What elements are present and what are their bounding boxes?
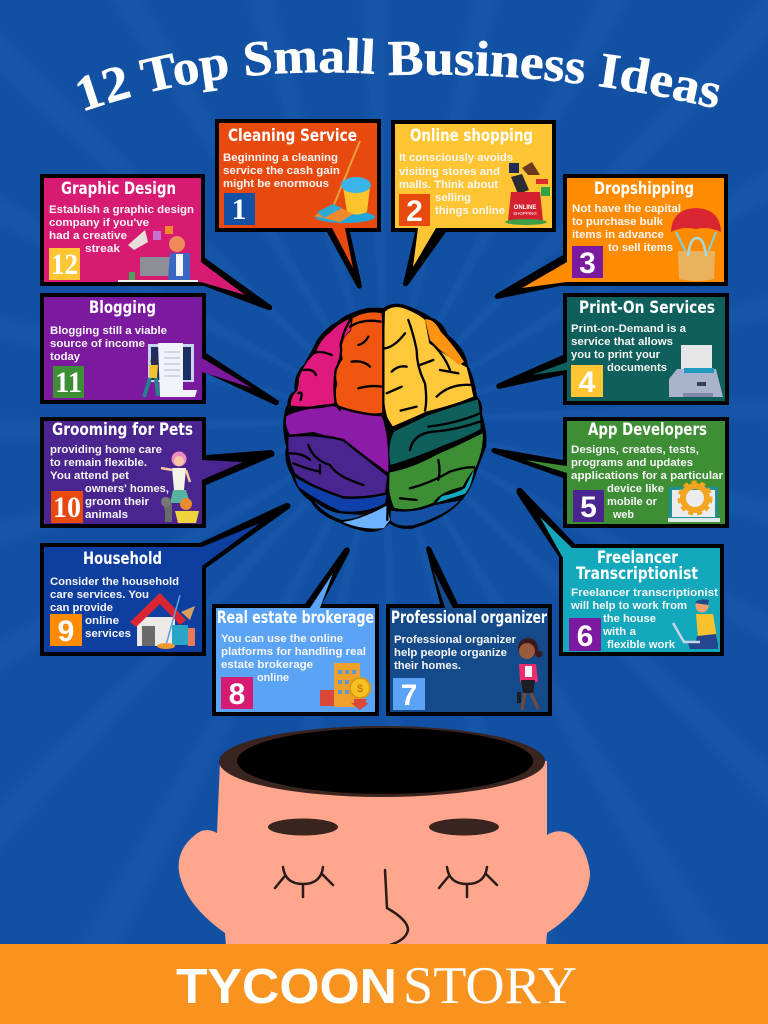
text block: malls. Think about (399, 179, 498, 191)
number 11: 11 (55, 366, 82, 399)
text block: Freelancer transcriptionist (571, 587, 718, 599)
heading: App Developers (588, 420, 707, 439)
panel: 7 professional organizer (386, 546, 552, 716)
icon: businesswoman (517, 638, 542, 710)
icon: laptop with gear (668, 482, 720, 522)
text block: might be enormous (223, 178, 329, 190)
icon: shopping bag: ONLINE (514, 205, 536, 211)
heading: Cleaning Service (228, 126, 357, 145)
text block: you to print your (571, 349, 661, 361)
icon: designer at desk (118, 226, 198, 281)
right eye (439, 867, 497, 897)
text block: services (85, 628, 131, 640)
text block (221, 633, 366, 684)
number 12: 12 (51, 248, 78, 281)
open head rim (219, 726, 545, 797)
text block (571, 444, 724, 521)
text block: visiting stores and (399, 166, 500, 178)
number 3 (572, 246, 603, 280)
text block: had a creative (49, 230, 127, 242)
text block: items in advance (572, 229, 664, 241)
panel: 5 app developers (491, 417, 729, 528)
footer band (0, 944, 768, 1024)
text block: flexible work (607, 639, 676, 651)
icon: shopping bag: SHOPPING (513, 211, 537, 216)
panel: 8 real estate brokerage (212, 547, 379, 716)
panel: 6 freelancer transcriptionist (516, 488, 724, 656)
text block: the house (603, 613, 656, 625)
text block: Not have the capital (572, 203, 681, 215)
text block: estate brokerage (221, 659, 313, 671)
number 7 (393, 678, 425, 712)
text block: Establish a graphic design (49, 204, 194, 216)
heading: Freelancer (597, 548, 679, 567)
text block: platforms for handling real (221, 646, 366, 658)
text block: with a (602, 626, 637, 638)
text block: online (257, 672, 289, 684)
panel: 4 print-on services (496, 293, 729, 405)
text block: to sell items (608, 242, 673, 254)
number 5 (573, 490, 604, 524)
number 6 (569, 618, 601, 653)
heading (576, 548, 698, 583)
text block (49, 204, 194, 255)
title: 12 Top Small Business Ideas (77, 38, 720, 111)
text block: will help to work from (570, 600, 687, 612)
text block (50, 444, 169, 521)
text block (570, 587, 718, 651)
text block: It consciously avoids (399, 152, 513, 164)
panel: 10 grooming for pets (40, 417, 275, 528)
icon: buildings and coin: $ (357, 683, 363, 695)
panel: 11 blogging (40, 293, 279, 405)
text block: programs and updates (571, 457, 693, 469)
number 7: 7 (401, 679, 417, 712)
left eye (275, 867, 333, 897)
text block: help people organize (394, 647, 507, 659)
text block: today (50, 351, 81, 363)
illustration: head (179, 726, 590, 946)
panel: 12 graphic design (40, 174, 272, 310)
text block (223, 152, 340, 190)
number 8 (221, 677, 253, 711)
text block: Professional organizer (394, 634, 517, 646)
icon: woman with pets (161, 452, 199, 523)
text block: web (612, 509, 634, 521)
brain (284, 305, 485, 531)
text block: streak (85, 243, 121, 255)
text block: mobile or (607, 496, 658, 508)
icon: parachute bag (671, 208, 721, 281)
icon: freelancer with laptop (673, 599, 718, 649)
text block: online (85, 615, 119, 627)
text block (571, 323, 687, 374)
left eyebrow (268, 818, 338, 836)
number 9 (50, 614, 82, 648)
text block: owners' homes, (85, 483, 169, 495)
text block: You can use the online (221, 633, 343, 645)
text block (399, 152, 513, 217)
text block (572, 203, 681, 254)
heading: Dropshipping (594, 179, 694, 198)
text block: company if you've (49, 217, 149, 229)
text block: selling (435, 192, 471, 204)
text block: groom their (85, 496, 150, 508)
icon: house with cleaning tools (130, 593, 195, 649)
icon: buildings and coin (320, 663, 370, 710)
text block: providing home care (50, 444, 162, 456)
heading: Graphic Design (61, 179, 176, 198)
text block: service the cash gain (223, 165, 340, 177)
text block: their homes. (394, 660, 461, 672)
number 10: 10 (53, 491, 81, 524)
text block: service that allows (571, 336, 673, 348)
panel: 1 cleaning service (215, 119, 381, 289)
number 3: 3 (579, 247, 596, 280)
text block (394, 634, 517, 672)
number 2 (399, 194, 430, 228)
panel: 9 household (40, 503, 290, 656)
heading: Household (83, 549, 162, 568)
icon: bucket and mop (314, 141, 375, 223)
number 5: 5 (580, 491, 597, 524)
heading: Print-On Services (579, 298, 715, 317)
nose (385, 870, 408, 945)
open head hollow (237, 728, 533, 794)
text block: documents (607, 362, 667, 374)
icon: printer (669, 345, 723, 397)
heading: Transcriptionist (576, 564, 698, 583)
number 2: 2 (406, 195, 423, 228)
heading: Online shopping (410, 126, 533, 145)
text block: Beginning a cleaning (223, 152, 338, 164)
brand logo text: TYCOON (176, 960, 397, 1014)
text block: source of income (50, 338, 145, 350)
text block: animals (85, 509, 128, 521)
text block: device like (607, 483, 664, 495)
text block (50, 325, 167, 363)
text block: to purchase bulk (572, 216, 664, 228)
face (179, 761, 590, 946)
text block: things online (435, 205, 505, 217)
number 1: 1 (232, 193, 246, 226)
text block: to remain flexible. (50, 457, 147, 469)
text block: applications for a particular (571, 470, 724, 482)
heading: Grooming for Pets (52, 420, 193, 439)
heading: Real estate brokerage (217, 608, 374, 627)
text block: Print-on-Demand is a (571, 323, 687, 335)
right eyebrow (429, 818, 499, 836)
icon: blogger with document (144, 343, 197, 397)
icon: shopping bag (505, 162, 550, 225)
brand logo text: STORY (403, 957, 577, 1015)
number 6: 6 (577, 620, 593, 653)
text block: You attend pet (50, 470, 129, 482)
panel: 3 dropshipping (495, 174, 728, 299)
number 1 (224, 193, 255, 226)
text block: Designs, creates, tests, (571, 444, 699, 456)
text block: Consider the household (50, 576, 179, 588)
text block: care services. You (50, 589, 149, 601)
number 4 (571, 365, 603, 399)
panel: 2 online shopping (391, 120, 556, 286)
number 8: 8 (229, 678, 245, 711)
text block: Blogging still a viable (50, 325, 167, 337)
heading: Professional organizer (391, 608, 548, 627)
number 9: 9 (58, 615, 74, 648)
text block (50, 576, 179, 640)
number 4: 4 (579, 366, 596, 399)
heading: Blogging (89, 298, 156, 317)
text block: can provide (50, 602, 113, 614)
